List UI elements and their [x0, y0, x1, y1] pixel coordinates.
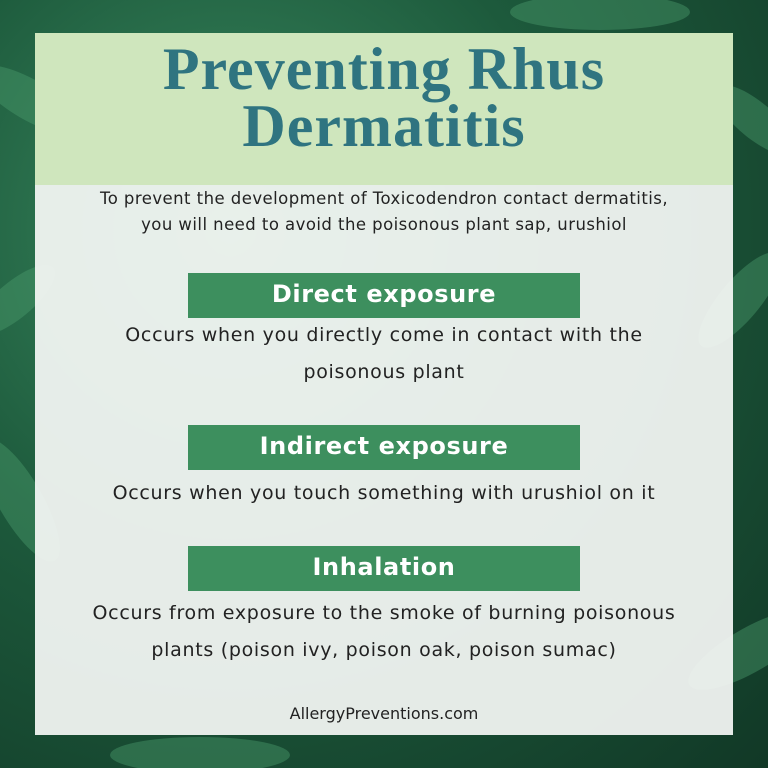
- title: Preventing Rhus: [163, 36, 605, 102]
- heading: direct exposure: [188, 273, 580, 318]
- header band: [35, 33, 733, 185]
- title: Dermatitis: [242, 93, 526, 159]
- text: inhalation: plants (poison ivy, poison oak, poison sumac): [151, 639, 617, 661]
- heading: direct exposure: Direct exposure: [272, 280, 496, 308]
- text: inhalation: [93, 602, 675, 661]
- subtitle: [100, 189, 668, 234]
- heading: indirect exposure: Indirect exposure: [260, 432, 508, 460]
- heading: indirect exposure: [188, 425, 580, 470]
- title: [163, 36, 605, 159]
- text: indirect exposure: Occurs when you touch something with urushiol on it: [113, 482, 655, 504]
- text: direct exposure: Occurs when you directly come in contact with the: [125, 324, 643, 346]
- heading: inhalation: Inhalation: [312, 553, 456, 581]
- text: direct exposure: [125, 324, 643, 383]
- subtitle: you will need to avoid the poisonous plant sap, urushiol: [141, 215, 627, 234]
- text: direct exposure: poisonous plant: [303, 361, 465, 383]
- text: inhalation: Occurs from exposure to the smoke of burning poisonous: [93, 602, 675, 624]
- subtitle: To prevent the development of Toxicodendron contact dermatitis,: [100, 189, 668, 208]
- heading: inhalation: [188, 546, 580, 591]
- footer: AllergyPreventions.com: [290, 704, 478, 723]
